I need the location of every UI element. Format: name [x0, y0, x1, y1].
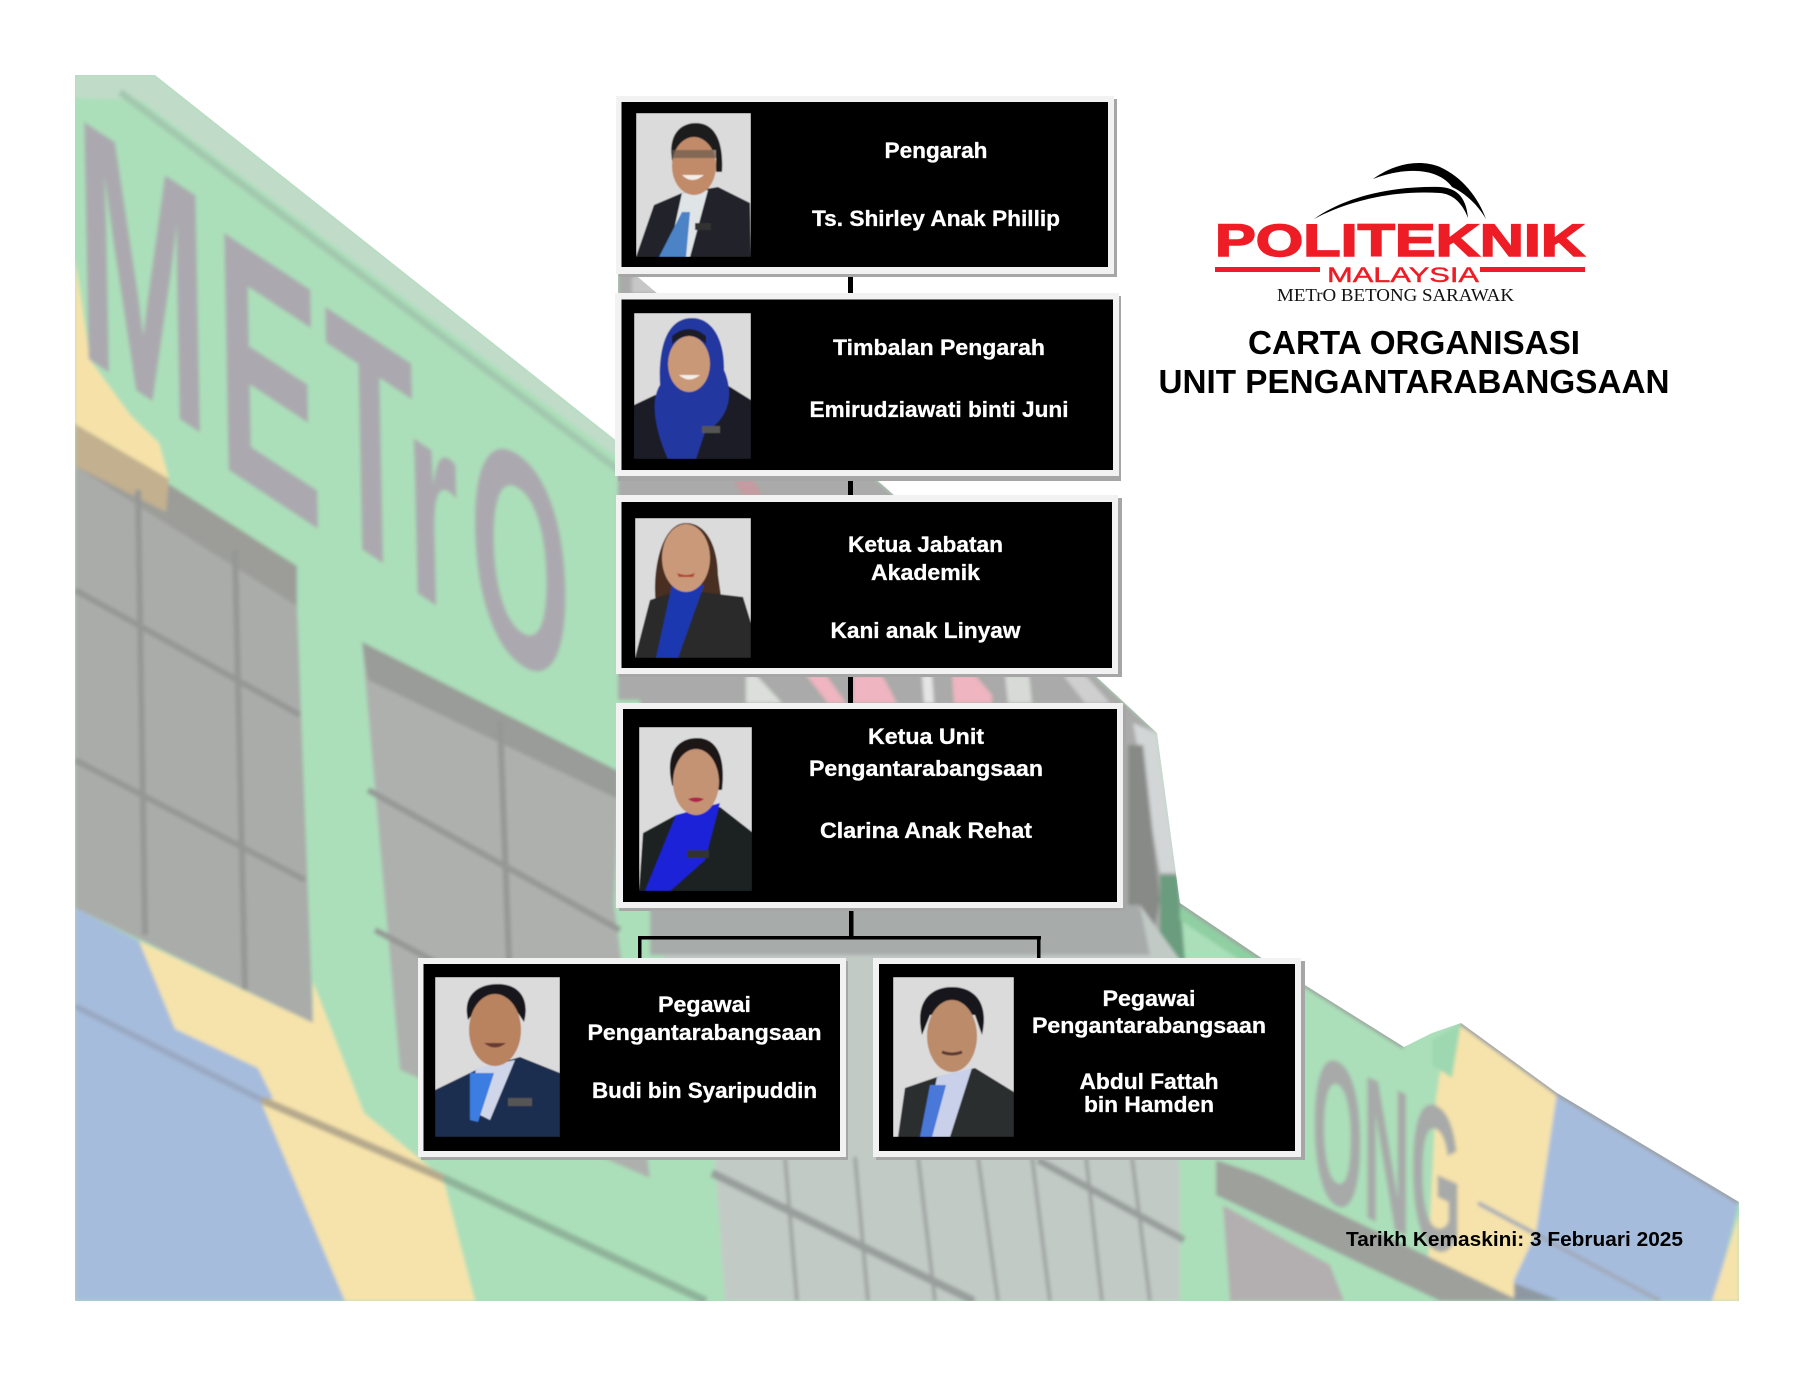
- building sign lettering: [72, 41, 1461, 1304]
- building sign lettering: M: [72, 41, 212, 514]
- logo: Politeknik Malaysia: [1215, 163, 1586, 305]
- building sign lettering: E: [212, 152, 326, 607]
- logo: Politeknik Malaysia: MALAYSIA: [1327, 264, 1479, 287]
- org box: Pegawai Budi: [418, 958, 848, 1160]
- role and name: Timbalan Pengarah: [833, 335, 1045, 360]
- org box: Ketua Unit Pengantarabangsaan: [616, 703, 1126, 911]
- role and name: Pengarah: [884, 138, 988, 163]
- portrait: Shirley: [636, 113, 751, 257]
- org box: Ketua Jabatan Akademik: [616, 495, 1122, 677]
- org box: Pegawai Budi: Pengantarabangsaan: [588, 1020, 822, 1045]
- portrait: Kani: [635, 518, 751, 658]
- building sign lettering: O: [466, 359, 575, 761]
- portrait: Budi: [435, 977, 560, 1137]
- update date note: Tarikh Kemaskini: 3 Februari 2025: [1346, 1229, 1683, 1251]
- role and name: Pegawai: [658, 992, 751, 1017]
- org box: Timbalan Pengarah: Emirudziawati binti Juni: [810, 397, 1068, 422]
- connector lines: [638, 274, 1041, 959]
- org box: Pegawai Abdul Fattah: bin Hamden: [1084, 1092, 1214, 1117]
- org box: Ketua Unit Pengantarabangsaan: Clarina Anak Rehat: [820, 818, 1033, 843]
- org box: Ketua Jabatan Akademik: Kani anak Linyaw: [830, 618, 1021, 643]
- title: UNIT PENGANTARABANGSAAN: [1158, 364, 1670, 401]
- portrait: Clarina: [639, 727, 752, 891]
- role and name: Ketua Jabatan: [848, 532, 1003, 557]
- org box: Pegawai Budi: Budi bin Syaripuddin: [592, 1078, 817, 1103]
- role and name: Ketua Unit: [868, 724, 985, 749]
- building sign lettering: r: [402, 323, 463, 685]
- org box: Pengarah: [616, 96, 1117, 277]
- title: CARTA ORGANISASI: [1248, 325, 1580, 362]
- title: [1158, 325, 1670, 401]
- building sign lettering: T: [322, 235, 419, 654]
- org box: Pegawai Abdul Fattah: Pengantarabangsaan: [1032, 1013, 1266, 1038]
- portrait: Emirudziawati: [632, 313, 751, 459]
- logo: Politeknik Malaysia: POLITEKNIK: [1215, 215, 1586, 266]
- icon: black swoosh: [1314, 163, 1486, 219]
- org box: Ketua Unit Pengantarabangsaan: Pengantarabangsaan: [809, 756, 1043, 781]
- org box: Pengarah: Ts. Shirley Anak Phillip: [812, 206, 1060, 231]
- org box: Pegawai Abdul Fattah: Abdul Fattah: [1080, 1069, 1218, 1094]
- role and name: Pegawai: [1102, 986, 1196, 1011]
- portrait: Abdul Fattah: [893, 977, 1014, 1137]
- logo: Politeknik Malaysia: METrO BETONG SARAWAK: [1277, 285, 1514, 305]
- org box: Ketua Jabatan Akademik: Akademik: [871, 560, 981, 585]
- org box: Pegawai Abdul Fattah: [873, 958, 1305, 1160]
- org box: Timbalan Pengarah: [615, 293, 1121, 481]
- building sign lettering: ONG: [1312, 1008, 1461, 1304]
